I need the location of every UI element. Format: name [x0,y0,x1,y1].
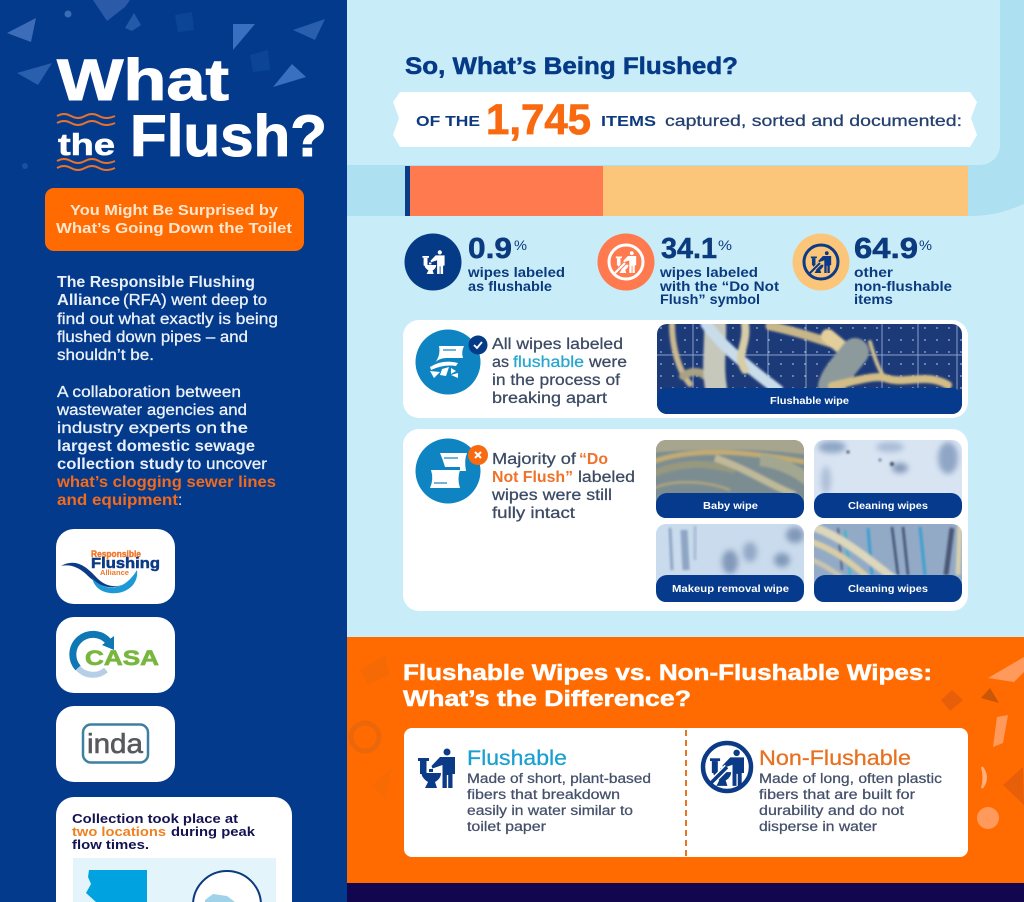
ribbon: 1,745 items [393,92,977,147]
text: non-flushable description: Non-Flushable [759,747,911,770]
logo: CASA [56,617,175,693]
text: all wipes labeled: as [492,354,509,371]
panel: left sidebar [0,0,347,902]
icon: do not flush [703,743,751,791]
photo: baby wipe [650,440,810,519]
logo: Responsible Flushing Alliance: Alliance [100,570,129,577]
ribbon: 1,745 items: OF THE [416,113,480,130]
panel: flushable wipes finding [403,320,968,418]
text: non-flushable description: disperse in water [759,819,878,834]
text: non-flushable description: durability and do not [759,803,904,818]
text: non-flushable description: Made of long, often plastic [759,771,942,786]
panel: collection locations: Collection took place at [72,811,239,826]
text: flushable description: toilet paper [467,819,547,834]
photo: cleaning wipes striped: Cleaning wipes [848,584,928,595]
heading: what's the difference [403,660,932,711]
text: flushable description: easily in water similar to [467,803,633,818]
stat: 0.9% flushable: wipes labeled [467,265,565,280]
text: all wipes labeled: were [588,354,627,371]
title: What the Flush?: Flush? [130,104,327,169]
panel: comparison card [404,728,968,857]
photo: baby wipe: Baby wipe [703,501,758,512]
stat: 34.1% do not flush: with the “Do Not [659,279,780,294]
title: What the Flush?: the [58,127,115,162]
stat: 34.1% do not flush: wipes labeled [659,265,758,280]
stat: 64.9% other: 64.9 [854,233,918,265]
icon: wipe breaking apart [416,330,488,394]
title: What the Flush?: What [57,48,229,113]
text block: collaboration description: wastewater agencies and [56,402,247,419]
text: majority of do not flush: fully intact [492,505,576,522]
photo: makeup removal wipe: Makeup removal wipe [672,584,789,595]
stat: 0.9% flushable: as flushable [468,279,553,294]
stat: 0.9% flushable: % [514,237,527,253]
text block: collaboration description: A collaboration between [57,384,241,401]
text: majority of do not flush: “Do [579,451,608,468]
text: majority of do not flush [491,451,635,522]
stat: 0.9% flushable [404,233,565,294]
icon: intact wipe [416,438,488,504]
text block: collaboration description: to uncover [187,456,267,473]
text block: RFA introduction: The Responsible Flushing [57,274,255,291]
text: all wipes labeled: breaking apart [492,390,608,407]
logo: INDA [56,706,175,782]
text block: RFA introduction: Alliance [57,292,120,309]
photo: flushable wipe [657,324,962,414]
logo: Responsible Flushing Alliance: Responsible [91,549,141,560]
text: all wipes labeled: in the process of [492,372,621,389]
text: all wipes labeled: All wipes labeled [492,336,623,353]
stat: 64.9% other: % [919,237,932,253]
text block: collaboration description: industry experts on [57,420,217,437]
text block: RFA introduction: find out what exactly is being [57,311,278,328]
heading: what's the difference: Flushable Wipes vs. Non-Flushable Wipes: [403,660,932,685]
text block: RFA introduction: shouldn’t be. [57,347,154,364]
text: flushable description: Made of short, plant-based [467,771,651,786]
heading: So, What's Being Flushed?: So, What’s Being Flushed? [405,53,738,80]
icon: person flushing [418,748,455,788]
text block: collaboration description: and equipment [57,492,178,509]
stat: 64.9% other: non-flushable [854,279,953,294]
stat: 34.1% do not flush [598,233,780,307]
callout: subtitle [45,188,304,251]
text block: RFA introduction: flushed down pipes – and [57,329,248,346]
stat: 64.9% other: items [854,292,893,307]
text: majority of do not flush: labeled [578,469,635,486]
photo: cleaning wipes striped [810,524,962,603]
text block: collaboration description: the [220,420,248,437]
stat: 34.1% do not flush: Flush” symbol [660,292,760,307]
text: flushable description [467,747,651,834]
text: majority of do not flush: Majority of [492,451,577,468]
text block: RFA introduction [57,274,278,364]
callout: subtitle: What’s Going Down the Toilet [56,221,292,237]
text: flushable description: Flushable [467,747,567,770]
text block: RFA introduction: (RFA) went deep to [123,292,267,309]
text: majority of do not flush: Not Flush” [492,469,573,486]
heading: what's the difference: What’s the Difference? [403,686,691,711]
text block: collaboration description: what’s clogging sewer lines [56,474,276,491]
panel: collection locations: during peak [171,824,256,839]
logo: Responsible Flushing Alliance: Flushing [91,555,160,572]
photo: cleaning wipes: Cleaning wipes [848,501,928,512]
text block: collaboration description [56,384,276,509]
photo: cleaning wipes [814,440,962,519]
ribbon: 1,745 items: ITEMS [601,113,656,130]
stat: 0.9% flushable: 0.9 [468,233,512,265]
text: majority of do not flush: wipes were still [491,487,612,504]
text: all wipes labeled [492,336,627,407]
bar chart: composition of items [405,166,968,216]
panel: collection locations [56,797,292,902]
text: all wipes labeled: flushable [513,354,584,371]
map: state outline [86,870,147,902]
ribbon: 1,745 items: 1,745 [486,96,591,144]
stat: 64.9% other [792,233,953,307]
photo: makeup removal wipe [656,524,804,603]
panel: flushable vs non-flushable section [347,637,1024,902]
stat: 64.9% other: other [854,265,894,280]
panel: do not flush wipes finding [403,429,968,611]
callout: subtitle: You Might Be Surprised by [70,203,278,219]
ribbon: 1,745 items: captured, sorted and documented: [665,113,962,130]
stat: 34.1% do not flush: 34.1 [661,233,717,265]
panel: collection locations: two locations [72,824,166,839]
map: location circle [193,871,261,902]
title: What the Flush? [57,48,327,170]
photo: flushable wipe: Flushable wipe [770,396,849,407]
text: non-flushable description [759,747,942,834]
logo: Responsible Flushing Alliance [56,529,175,604]
stat: 34.1% do not flush: % [718,237,732,253]
text block: collaboration description: largest domestic sewage [57,438,255,455]
panel: right column background [347,0,1024,902]
text: non-flushable description: fibers that are built for [759,787,916,802]
text block: collaboration description: collection study [57,456,184,473]
logo: INDA: inda [87,728,143,759]
logo: CASA: CASA [85,647,159,670]
text block: collaboration description: : [178,492,182,509]
text: flushable description: fibers that breakdown [467,787,620,802]
panel: collection locations: flow times. [72,837,149,852]
